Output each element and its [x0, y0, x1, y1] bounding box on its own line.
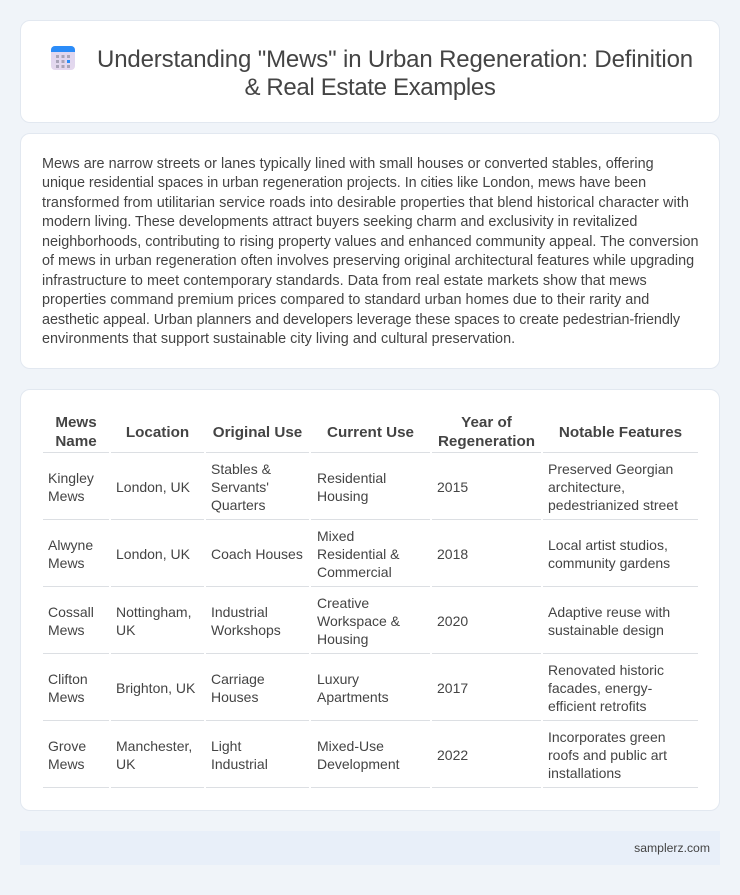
row: Clifton Mews	[48, 662, 664, 714]
table header row: Location	[126, 424, 189, 441]
table header row: Original Use	[213, 424, 302, 441]
table header row: Current Use	[327, 424, 414, 441]
row: Clifton Mews: Clifton	[48, 671, 88, 687]
row: Alwyne Mews: community gardens	[548, 555, 670, 571]
row: Grove Mews: Incorporates green	[548, 729, 666, 745]
row: Clifton Mews: 2017	[437, 680, 468, 696]
text block: description: neighborhoods, contributing to rising property values and enhanced community appeal. The conversion	[42, 234, 699, 250]
row: Kingley Mews: Mews	[48, 488, 85, 504]
row: Clifton Mews: Houses	[211, 689, 258, 705]
row: Kingley Mews: Quarters	[211, 497, 265, 513]
text block: description: of mews in urban regeneration often involves preserving original architectural features while upgrading	[42, 253, 694, 269]
text block: description: properties command premium prices compared to standard urban homes due to their rarity and	[42, 292, 649, 308]
row: Cossall Mews: Industrial	[211, 604, 268, 620]
table header row: Name	[55, 433, 97, 450]
row: Kingley Mews: Kingley	[48, 470, 94, 486]
row: Alwyne Mews: Local artist studios,	[548, 537, 668, 553]
row: Kingley Mews	[48, 461, 678, 513]
footer bar	[20, 831, 720, 865]
row: Clifton Mews: Brighton, UK	[116, 680, 195, 696]
row: Alwyne Mews: Commercial	[317, 564, 392, 580]
table header row: Notable Features	[559, 424, 682, 441]
text block: description: unique residential spaces in urban regeneration projects. In cities like London, mews have been	[42, 175, 646, 191]
row: Kingley Mews: Stables &	[211, 461, 271, 477]
text block: description: infrastructure to meet contemporary standards. Data from real estate markets show that mews	[42, 273, 647, 289]
row: Cossall Mews: sustainable design	[548, 622, 664, 638]
row: Clifton Mews: Luxury	[317, 671, 359, 687]
row: Cossall Mews: Mews	[48, 622, 85, 638]
row: Cossall Mews	[48, 595, 670, 647]
row: Alwyne Mews	[48, 528, 670, 580]
row: Alwyne Mews: London, UK	[116, 546, 190, 562]
row: Grove Mews: Grove	[48, 738, 86, 754]
row: Cossall Mews: UK	[116, 622, 135, 638]
row: Kingley Mews: pedestrianized street	[548, 497, 678, 513]
text block: description: transformed from utilitarian service roads into desirable properties that blend historical character with	[42, 195, 689, 211]
row: Cossall Mews: 2020	[437, 613, 468, 629]
row: Cossall Mews: Housing	[317, 631, 368, 647]
row: Grove Mews: Development	[317, 756, 400, 772]
panel: table card	[20, 389, 720, 811]
row: Grove Mews: Mews	[48, 756, 85, 772]
row: Kingley Mews: Residential	[317, 470, 386, 486]
table header row	[55, 414, 682, 450]
text block: description: aesthetic appeal. Urban planners and developers leverage these spaces to create pedestrian-friendly	[42, 312, 680, 328]
row: Kingley Mews: Servants'	[211, 479, 269, 495]
table header row: Year of	[461, 414, 512, 431]
footer text: samplerz.com	[634, 841, 710, 855]
row: Cossall Mews: Cossall	[48, 604, 94, 620]
row: Cossall Mews: Creative	[317, 595, 369, 611]
row: Clifton Mews: Renovated historic	[548, 662, 664, 678]
row: Cossall Mews: Adaptive reuse with	[548, 604, 670, 620]
row: Alwyne Mews: Coach Houses	[211, 546, 303, 562]
row: Grove Mews: Light	[211, 738, 241, 754]
panel: description card	[20, 133, 720, 369]
row: Grove Mews: roofs and public art	[548, 747, 667, 763]
row: Alwyne Mews: 2018	[437, 546, 468, 562]
row: Alwyne Mews: Mews	[48, 555, 85, 571]
panel: title card	[20, 20, 720, 123]
row: Grove Mews: Mixed-Use	[317, 738, 384, 754]
row: Clifton Mews: Apartments	[317, 689, 389, 705]
row: Grove Mews: 2022	[437, 747, 468, 763]
row: Kingley Mews: Preserved Georgian	[548, 461, 673, 477]
row: Kingley Mews: 2015	[437, 479, 468, 495]
row: Kingley Mews: architecture,	[548, 479, 625, 495]
table header row: Regeneration	[438, 433, 535, 450]
text block: description	[42, 156, 699, 347]
text block: description: environments that support sustainable city living and cultural preservation.	[42, 331, 515, 347]
text block: description: Mews are narrow streets or lanes typically lined with small houses or converted stables, offering	[42, 156, 654, 172]
row: Grove Mews: Manchester,	[116, 738, 192, 754]
row: Kingley Mews: London, UK	[116, 479, 190, 495]
table	[43, 414, 698, 788]
row: Grove Mews: installations	[548, 765, 621, 781]
row: Clifton Mews: Mews	[48, 689, 85, 705]
row: Cossall Mews: Workspace &	[317, 613, 400, 629]
text block: description: modern living. These developments attract buyers seeking charm and exclusivity in revitalized	[42, 214, 637, 230]
title: Understanding "Mews" in Urban Regeneration: Definition	[97, 46, 693, 73]
row: Grove Mews: UK	[116, 756, 135, 772]
icon: calendar	[51, 46, 75, 70]
row: Alwyne Mews: Residential &	[317, 546, 400, 562]
row: Clifton Mews: Carriage	[211, 671, 265, 687]
row: Alwyne Mews: Mixed	[317, 528, 354, 544]
title	[97, 46, 693, 101]
row: Clifton Mews: facades, energy-	[548, 680, 652, 696]
row: Alwyne Mews: Alwyne	[48, 537, 93, 553]
table header row: Mews	[55, 414, 97, 431]
row: Grove Mews	[48, 729, 667, 781]
row: Kingley Mews: Housing	[317, 488, 368, 504]
title: & Real Estate Examples	[244, 74, 496, 101]
row: Cossall Mews: Nottingham,	[116, 604, 191, 620]
row: Grove Mews: Industrial	[211, 756, 268, 772]
row: Cossall Mews: Workshops	[211, 622, 281, 638]
row: Clifton Mews: efficient retrofits	[548, 698, 647, 714]
